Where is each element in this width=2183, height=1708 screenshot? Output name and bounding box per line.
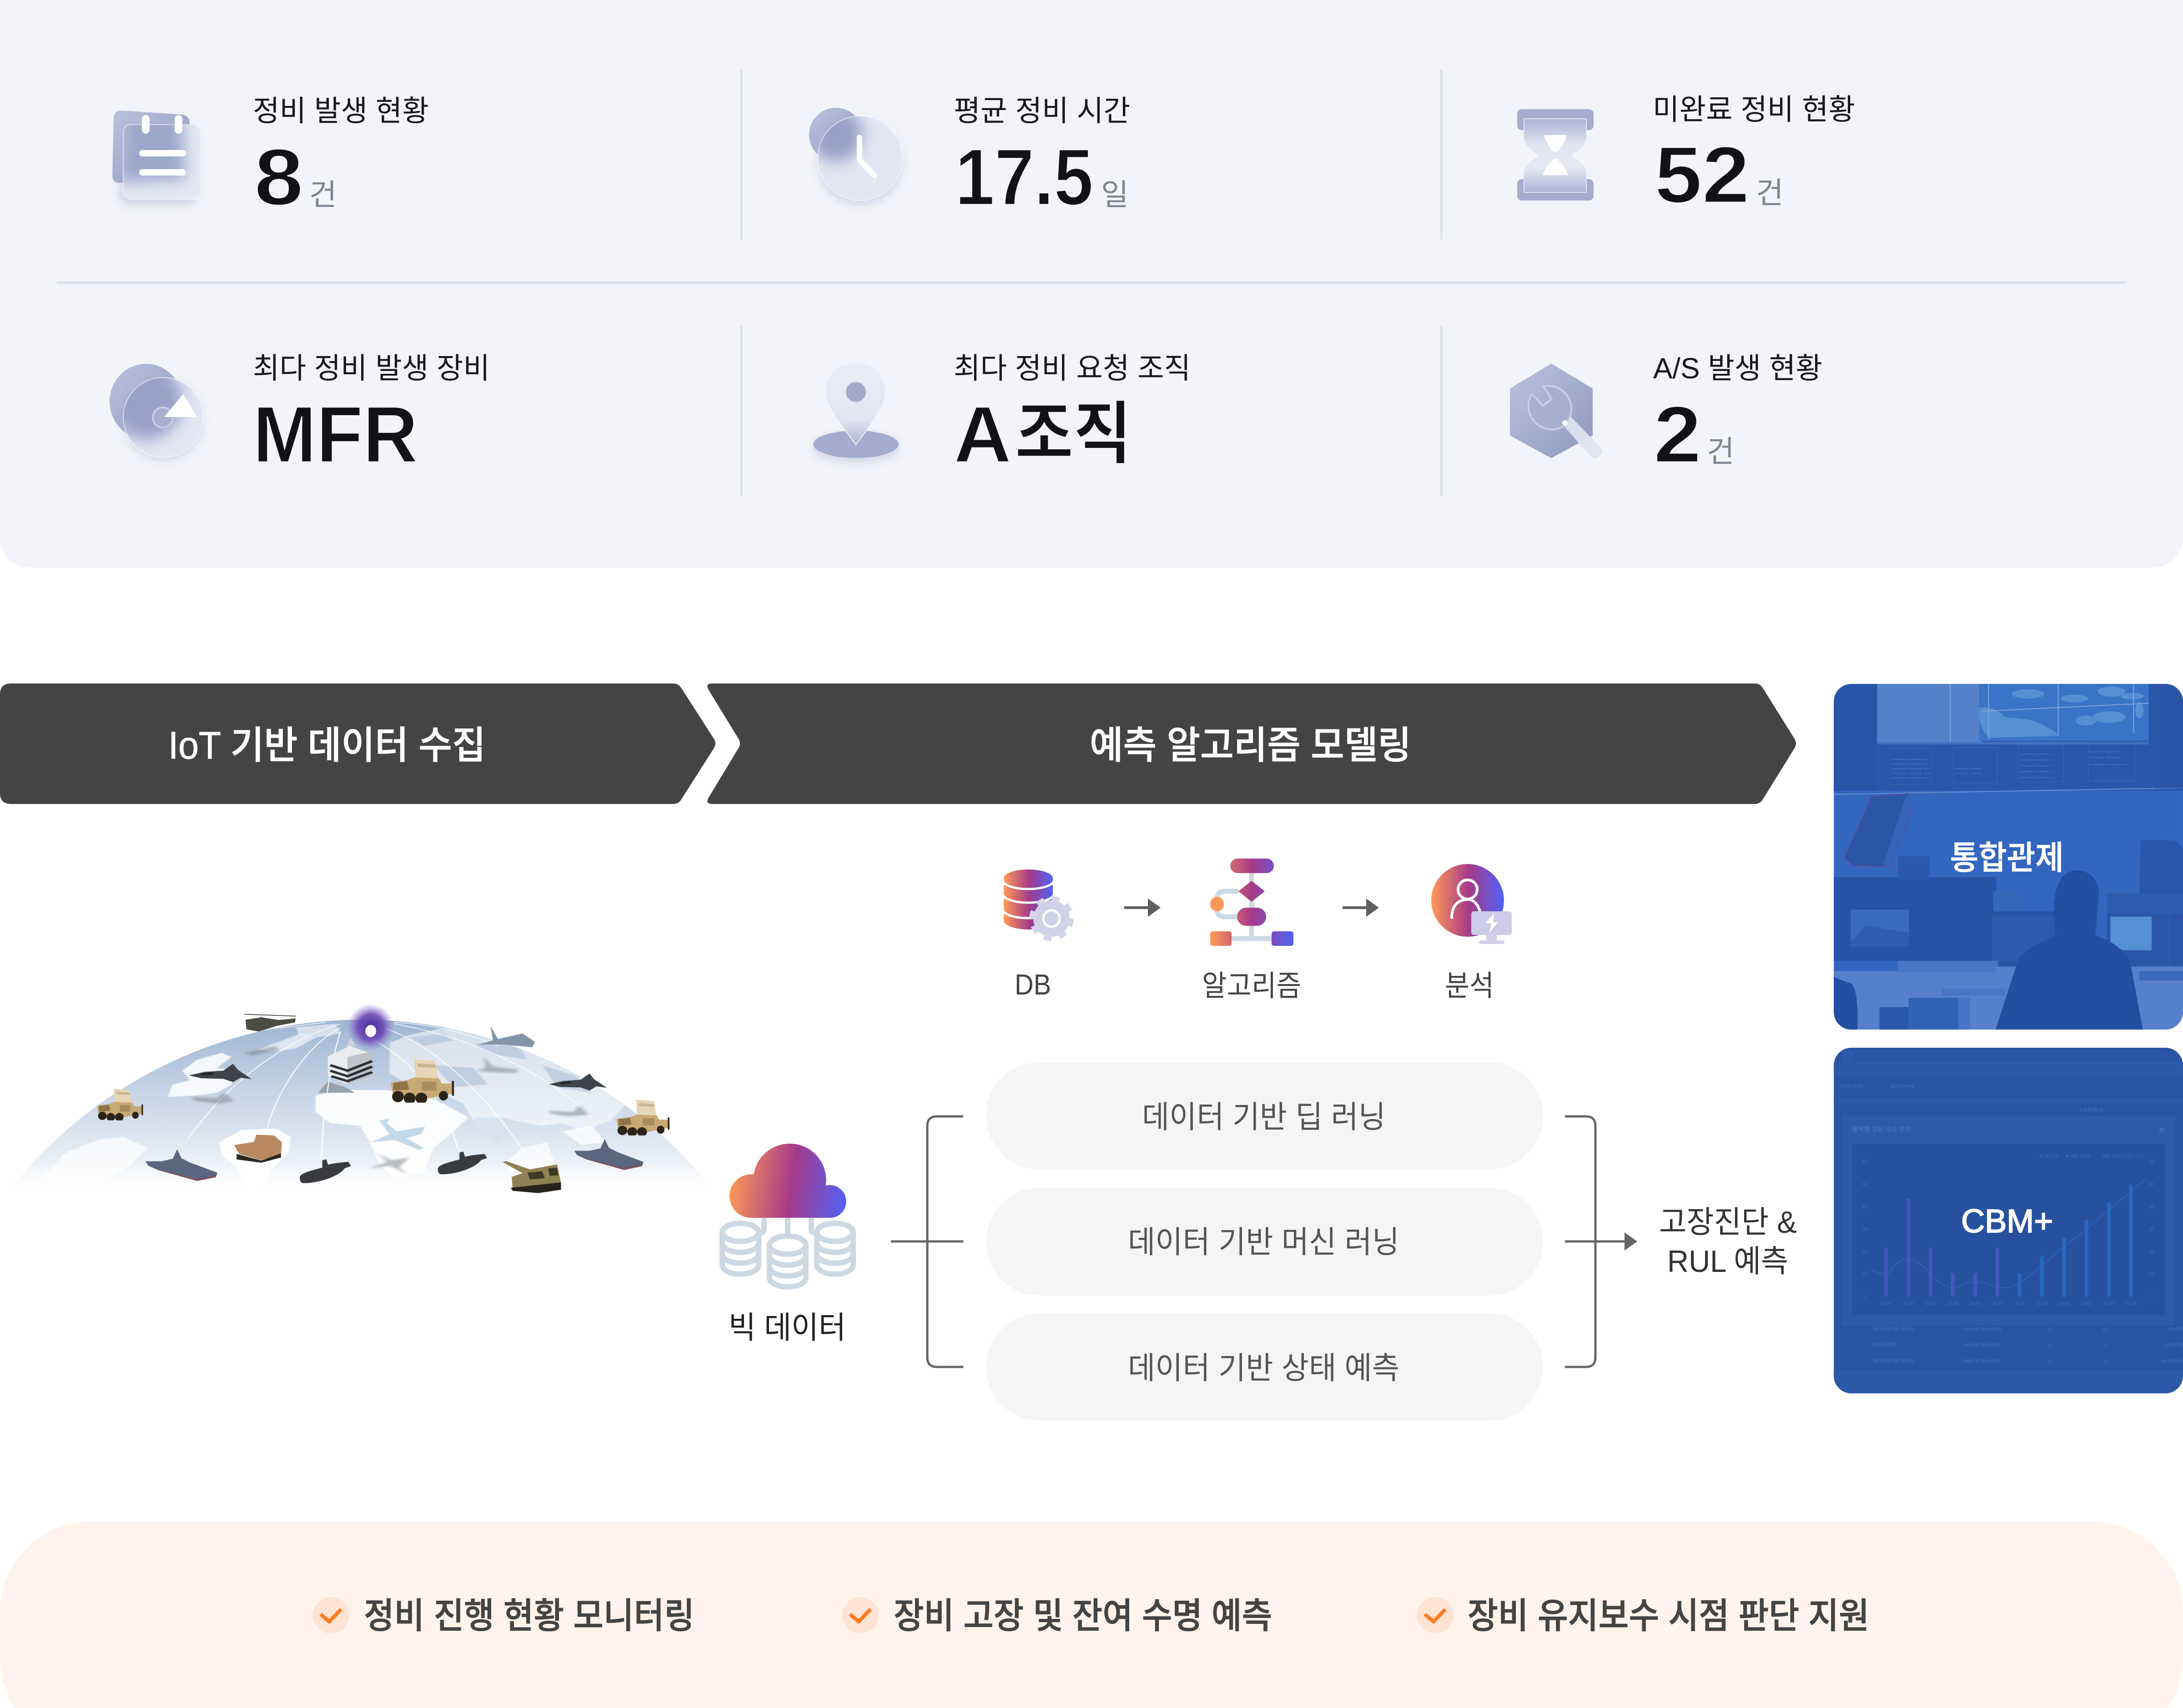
chart axes: 30 [1862, 1227, 1867, 1232]
chart legend: 과거실적 [2044, 1153, 2059, 1158]
arrow header: 예측 알고리즘 모델링: 예측 알고리즘 모델링 [1090, 724, 1411, 767]
text: 고장진단 & RUL 예측: 고장진단 & [1659, 1205, 1797, 1240]
icon: cloud over databases [722, 1144, 853, 1287]
chart axes: 23.02 [2080, 1301, 2092, 1306]
unit: 건 [1707, 435, 1735, 468]
dashboard background text: 믹서 조립체 [1873, 1342, 1896, 1348]
chart axes: 10 [2149, 1272, 2154, 1277]
chart axes: 22.05 [1880, 1301, 1892, 1306]
asset: helicopter [244, 1014, 296, 1031]
icon: clock [809, 108, 902, 205]
chart axes: 22.09 [1969, 1301, 1981, 1306]
heading: 통합관제: 통합관제 [1950, 840, 2064, 877]
illustration: globe with military assets [0, 1004, 739, 1206]
label: A/S 발생 현황 [1653, 352, 1822, 385]
asset: command building [328, 1038, 372, 1085]
value: 조직 [1015, 396, 1132, 472]
text: 고장진단 & RUL 예측: RUL 예측 [1667, 1244, 1788, 1279]
label: 평균 정비 시간 [954, 95, 1130, 127]
panel: outcomes [0, 1522, 2183, 1708]
asset: armored vehicle [234, 1135, 282, 1163]
arrow: algorithm to analysis [1343, 899, 1379, 917]
pill: 데이터 기반 상태 예측 [986, 1313, 1543, 1421]
arrow header: IoT 기반 데이터 수집 [0, 683, 715, 804]
icon: location pin [813, 362, 899, 462]
chart axes: 50 [2149, 1182, 2154, 1187]
icon: analysis user with monitor [1431, 864, 1512, 944]
stat: 정비 발생 현황 [112, 96, 428, 208]
pill: 데이터 기반 딥 러닝: 데이터 기반 딥 러닝 [1142, 1100, 1386, 1135]
icon: notepad [112, 111, 201, 205]
pill: 데이터 기반 딥 러닝 [986, 1062, 1543, 1169]
chart axes: 60 [1862, 1160, 1867, 1165]
stat: 최다 정비 발생 장비 [110, 354, 486, 463]
chart axes: 22.08 [1947, 1301, 1958, 1306]
chart legend [2040, 1153, 2143, 1158]
asset: self-propelled howitzer [503, 1161, 561, 1193]
pill: 데이터 기반 머신 러닝 [986, 1188, 1543, 1296]
unit: 건 [1756, 176, 1784, 210]
asset: transport plane [478, 1026, 535, 1047]
value: 8 [254, 133, 303, 222]
outcome: 장비 고장 및 잔여 수명 예측: 장비 고장 및 잔여 수명 예측 [894, 1596, 1272, 1636]
chart axes: 22.10 [1992, 1301, 2003, 1306]
chart axes: 30 [2149, 1227, 2154, 1232]
chart axes: 23.03 [2103, 1301, 2114, 1306]
label: 미완료 정비 현황 [1653, 93, 1855, 126]
globe surface [0, 1020, 739, 1206]
outcome: 정비 진행 현황 모니터링: 정비 진행 현황 모니터링 [364, 1596, 694, 1636]
value: 2 [1654, 390, 1701, 479]
chart axes: 10 [1862, 1272, 1867, 1277]
value [954, 390, 1132, 479]
label: 빅 데이터: 빅 데이터 [729, 1311, 846, 1345]
value: 52 [1655, 131, 1750, 220]
label: 최다 정비 발생 장비 [253, 352, 490, 385]
asset: fighter jet left [189, 1064, 252, 1082]
icon: radar disc [110, 364, 203, 460]
outcome: 장비 유지보수 시점 판단 지원: 장비 유지보수 시점 판단 지원 [1468, 1596, 1869, 1636]
chart axes: 20 [2149, 1250, 2154, 1255]
connector: big data to models [891, 1116, 963, 1367]
chart trend line [1871, 1180, 2145, 1288]
dashboard background text: 레이더 통제용 컴퓨터 [1873, 1326, 1914, 1332]
stat: 최다 정비 요청 조직 [813, 352, 1191, 479]
label: 알고리즘: 알고리즘 [1202, 970, 1301, 1002]
dashboard background text: 1440-37-513-1154 [1963, 1343, 2001, 1348]
dashboard background text: 21 [2047, 1359, 2052, 1364]
unit: 건 [309, 178, 337, 211]
chart axes: 22.12 [2037, 1301, 2048, 1306]
chart axes: 23.01 [2059, 1301, 2070, 1306]
dashboard background text: 0.5 [2102, 1327, 2109, 1332]
dashboard background text: 15 [2047, 1343, 2052, 1348]
chart axes: 22.11 [2014, 1301, 2026, 1306]
connector: models to prediction [1565, 1116, 1637, 1367]
dashboard background text: 레이더 통제용 컴퓨터 [1873, 1358, 1914, 1364]
chart legend: 예측 수요량 [2071, 1153, 2090, 1158]
chart bars [1884, 1185, 2133, 1297]
dashboard background text: 2023-03-04 [1840, 1084, 1863, 1089]
asset: warship left [146, 1149, 217, 1181]
pill: 데이터 기반 상태 예측: 데이터 기반 상태 예측 [1128, 1351, 1399, 1386]
asset: submarine right [438, 1151, 487, 1174]
chart axes: 60 [2149, 1160, 2154, 1165]
dashboard background text: 10 [2047, 1327, 2052, 1332]
asset: radar truck left [97, 1089, 143, 1121]
heading: CBM+: CBM+ [1961, 1203, 2053, 1240]
chart axes: 40 [1862, 1205, 1867, 1210]
asset: submarine left [300, 1160, 351, 1183]
value: A [954, 390, 1011, 479]
asset: drone [371, 1119, 425, 1150]
stat: A/S 발생 현황 [1511, 352, 1822, 479]
signal glow [347, 1004, 394, 1050]
asset: warship right [574, 1139, 644, 1170]
chart legend: 월별 고장횟수(대상 호기) [2102, 1153, 2143, 1158]
unit: 일 [1101, 178, 1129, 211]
dashboard background text: 4140-37-513-1890 [1963, 1327, 2001, 1332]
icon: hourglass [1517, 109, 1594, 201]
chart axes: 22.06 [1902, 1301, 1914, 1306]
asset shadows [192, 1046, 589, 1174]
panel: 통합관제 control room [1834, 684, 2183, 1030]
icon: database with gear [1003, 869, 1070, 937]
arrow header: 예측 알고리즘 모델링 [707, 683, 1796, 804]
stat: 평균 정비 시간 [809, 96, 1129, 208]
chart axes: 40 [2149, 1205, 2154, 1210]
icon: wrench hexagon [1511, 365, 1602, 458]
label: 최다 정비 요청 조직 [954, 352, 1191, 385]
label: 분석: 분석 [1445, 970, 1494, 1002]
dashboard background text: 수요량(종/점) [2079, 1107, 2105, 1113]
asset: radar truck centre [391, 1059, 454, 1104]
chart axes [1862, 1160, 2154, 1306]
asset: radar truck right [616, 1100, 670, 1136]
dashboard background text: 3 [2104, 1359, 2107, 1364]
modal title: 품목별 고장 수요 추이 [1852, 1126, 1911, 1134]
icon: algorithm flowchart [1210, 859, 1293, 946]
pill: 데이터 기반 머신 러닝: 데이터 기반 머신 러닝 [1128, 1225, 1399, 1260]
arrow header: IoT 기반 데이터 수집: IoT 기반 데이터 수집 [168, 724, 486, 767]
data link arcs [187, 1022, 592, 1161]
chart axes: 0 [2151, 1295, 2153, 1300]
asset: fighter jet right [548, 1074, 607, 1090]
chart axes: 50 [1862, 1182, 1867, 1187]
label: 정비 발생 현황 [253, 95, 429, 127]
dashboard background text [1840, 1084, 2183, 1364]
chart axes: 22.07 [1925, 1301, 1937, 1306]
value: 17.5 [955, 133, 1093, 222]
dashboard background text: 2023-04-04 [1890, 1084, 1914, 1089]
chart axes: 0 [1863, 1295, 1866, 1300]
dashboard background text: 3 [2104, 1343, 2107, 1348]
dashboard background text: 5998-37-513-1156 [1963, 1359, 2001, 1364]
label: DB: DB [1015, 968, 1051, 1001]
chart axes: 20 [1862, 1250, 1867, 1255]
value: MFR [253, 390, 418, 479]
arrow: DB to algorithm [1124, 899, 1161, 917]
panel: maintenance status summary [0, 0, 2183, 568]
stat: 미완료 정비 현황 [1517, 93, 1855, 220]
chart axes: 23.04 [2125, 1301, 2137, 1306]
panel: CBM+ dashboard [1834, 1048, 2183, 1393]
text: 고장진단 & RUL 예측 [1659, 1205, 1797, 1279]
